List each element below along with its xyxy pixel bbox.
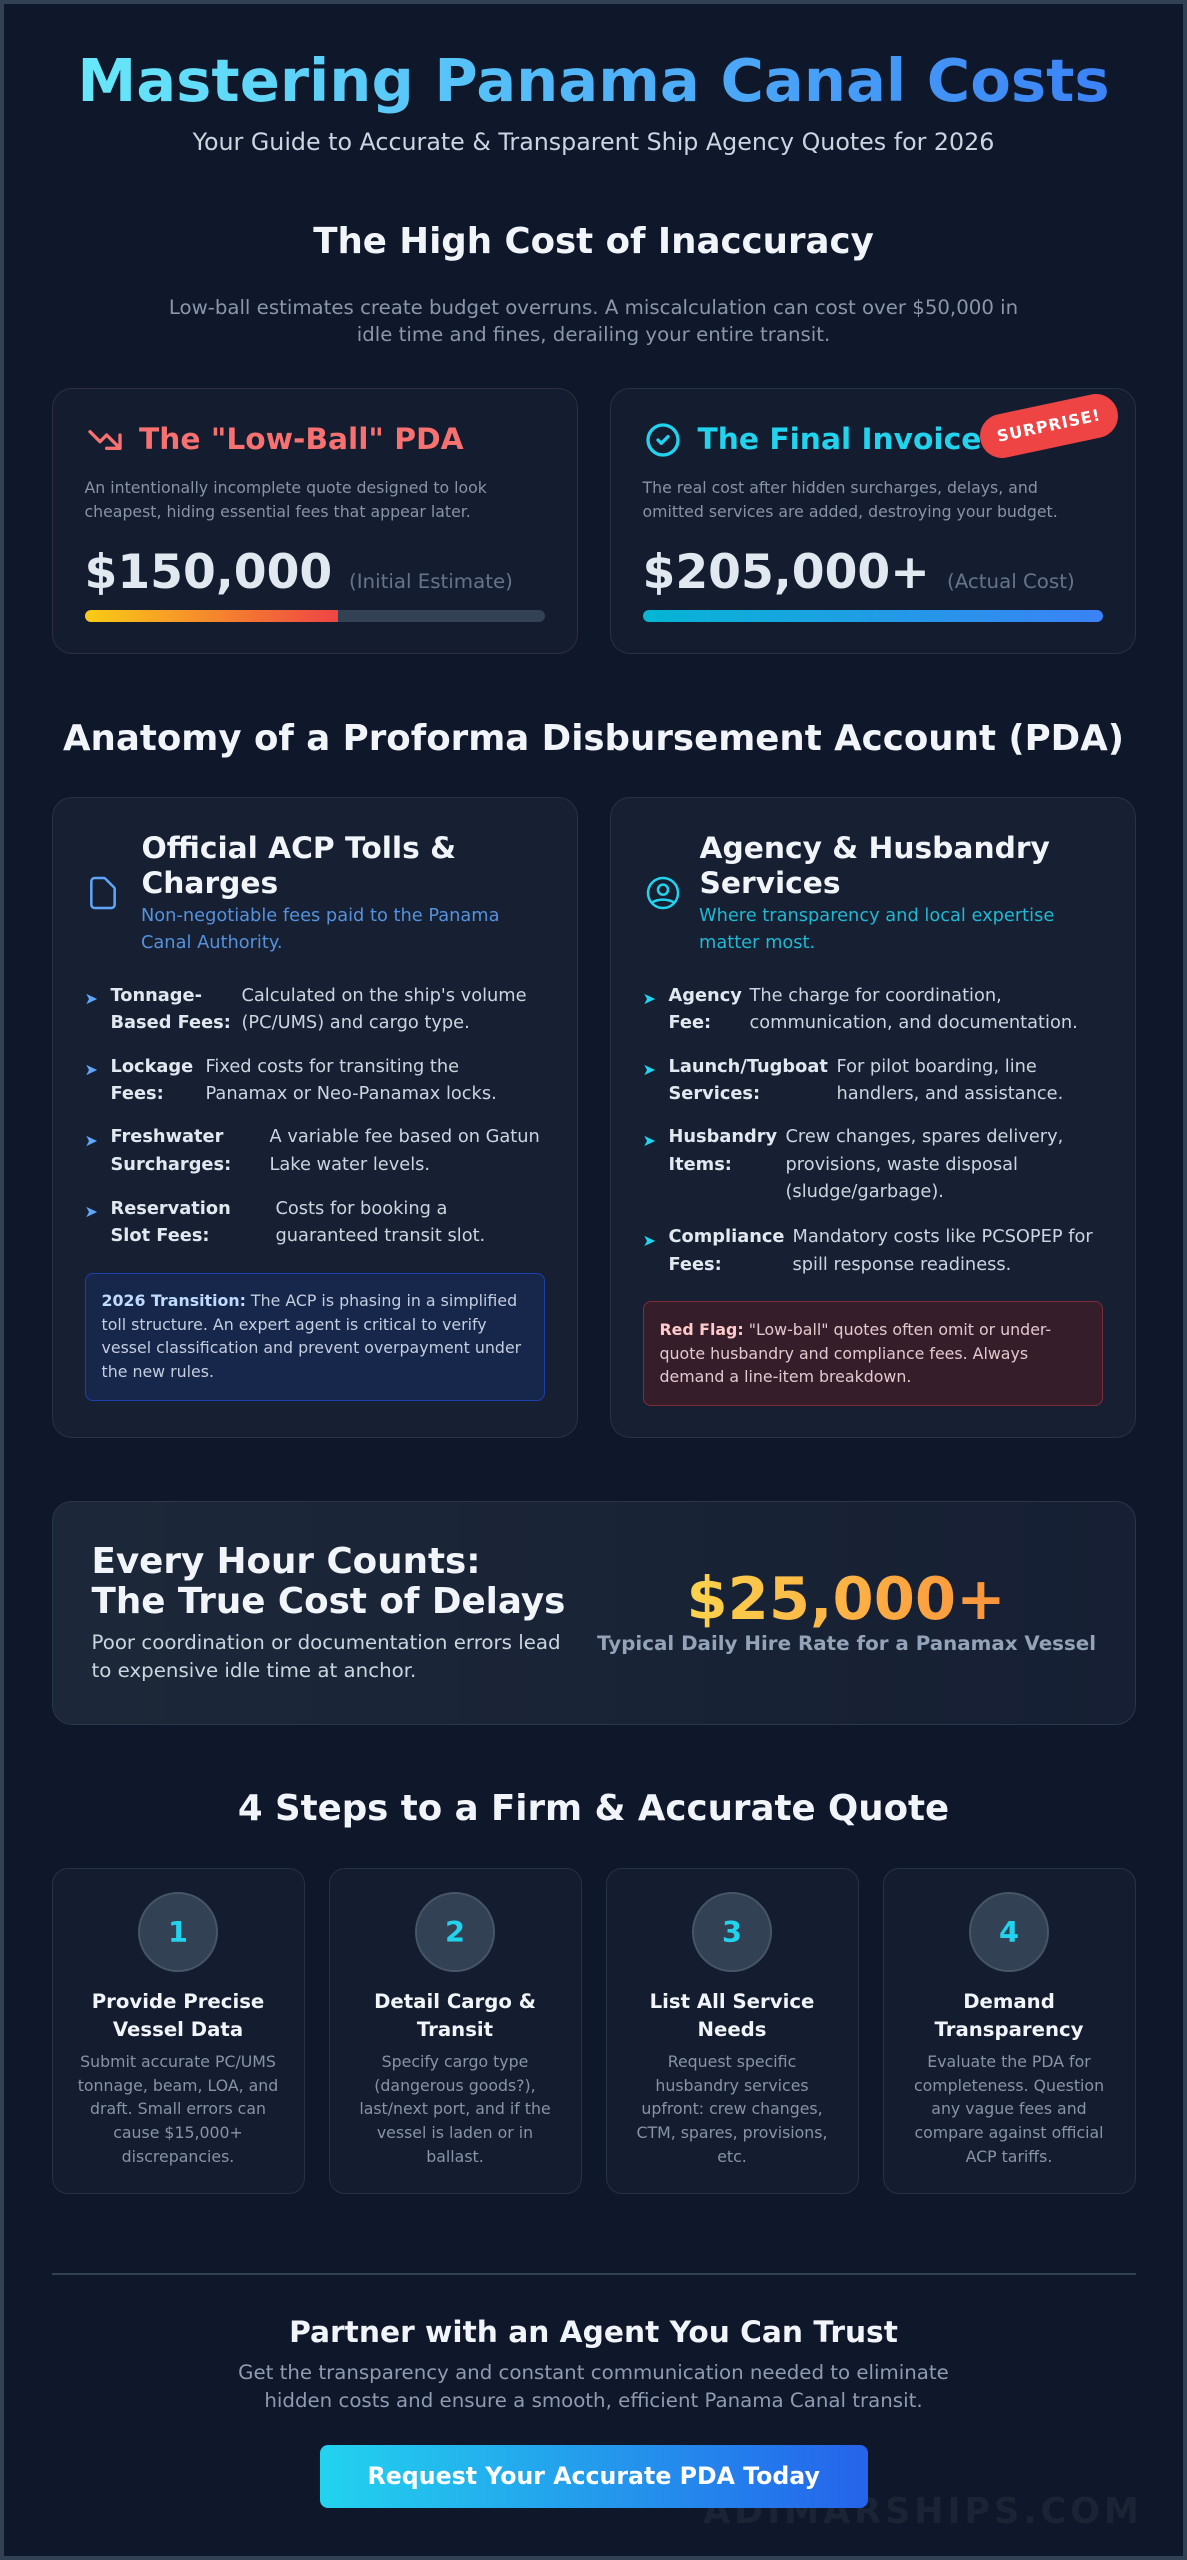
step number: [692, 1892, 772, 1972]
step title: [92, 1990, 264, 2041]
closing paragraph: Get the transparency and constant communication needed to eliminate: [238, 2360, 949, 2384]
callout: 2026 transition: vessel classification and prevent overpayment under: [102, 1338, 521, 1357]
heading: anatomy: Anatomy of a Proforma Disbursement Account (PDA): [63, 718, 1124, 759]
step card 4: [882, 1868, 1136, 2194]
panel subtitle: [141, 904, 500, 953]
list item: husbandry items: provisions, waste disposal: [786, 1154, 1018, 1174]
list item: launch tugboat: [642, 1056, 1063, 1104]
list item: compliance: spill response readiness.: [792, 1254, 1011, 1274]
icon: check circle: [646, 423, 680, 457]
step text: (dangerous goods?),: [374, 2076, 536, 2095]
list item: reservation: ➤: [84, 1202, 98, 1221]
list item: freshwater: Lake water levels.: [270, 1154, 430, 1174]
step title: Vessel Data: [113, 2018, 243, 2041]
step text: upfront: crew changes,: [641, 2099, 823, 2118]
panel heading: Agency & Husbandry: [700, 830, 1050, 866]
step text: Specify cargo type: [382, 2052, 528, 2071]
list item: lockage: Lockage: [110, 1056, 193, 1077]
card description: cheapest, hiding essential fees that appear later.: [84, 502, 471, 521]
panel: official ACP tolls: [52, 797, 578, 1438]
card description: [84, 478, 487, 521]
step text: completeness. Question: [914, 2076, 1104, 2095]
step text: any vague fees and: [931, 2099, 1087, 2118]
card description: [642, 478, 1058, 521]
step title: Detail Cargo &: [374, 1990, 536, 2013]
icon: trending down: [88, 430, 122, 450]
card description: omitted services are added, destroying your budget.: [642, 502, 1058, 521]
step text: CTM, spares, provisions,: [636, 2123, 827, 2142]
price: actual cost: $205,000+: [642, 545, 930, 600]
step number: 2: [445, 1915, 465, 1949]
list item: tonnage: (PC/UMS) and cargo type.: [242, 1012, 470, 1033]
list item: freshwater: Surcharges:: [110, 1154, 231, 1174]
list item: husbandry items: Items:: [668, 1154, 732, 1174]
list item: agency fee: ➤: [642, 989, 656, 1008]
panel: cost of delays: [52, 1501, 1136, 1724]
list item: agency fee: [642, 984, 1078, 1033]
delays paragraph: to expensive idle time at anchor.: [92, 1659, 416, 1682]
list item: compliance: Mandatory costs like PCSOPEP for: [792, 1226, 1093, 1247]
step text: ballast.: [426, 2147, 484, 2166]
list item: reservation: Slot Fees:: [110, 1225, 210, 1246]
price: initial estimate: [84, 545, 513, 600]
step text: [636, 2052, 827, 2166]
step title: Provide Precise: [92, 1990, 264, 2013]
heading: partner: Partner with an Agent You Can Trust: [289, 2314, 898, 2348]
step title: [374, 1990, 536, 2041]
subtitle: Your Guide to Accurate & Transparent Ship Agency Quotes for 2026: [193, 128, 994, 156]
list item: reservation: guaranteed transit slot.: [276, 1225, 485, 1246]
title: Mastering Panama Canal Costs: [77, 46, 1110, 115]
list item: tonnage: ➤: [84, 989, 98, 1008]
price: initial estimate: (Initial Estimate): [349, 570, 513, 593]
panel: low-ball PDA: [52, 388, 578, 654]
step text: compare against official: [914, 2123, 1104, 2142]
step text: etc.: [717, 2147, 747, 2166]
panel subtitle: Non-negotiable fees paid to the Panama: [141, 904, 500, 926]
step title: [934, 1990, 1084, 2041]
step number: [969, 1892, 1049, 1972]
list item: launch tugboat: ➤: [642, 1060, 656, 1079]
step number: [415, 1892, 495, 1972]
step number: 1: [168, 1915, 188, 1949]
step number: 3: [722, 1915, 742, 1949]
list item: tonnage: Based Fees:: [110, 1012, 231, 1033]
step title: Transit: [417, 2018, 493, 2041]
list item: compliance: Compliance: [668, 1226, 784, 1247]
list item: husbandry items: Crew changes, spares delivery,: [786, 1126, 1063, 1147]
panel subtitle: Canal Authority.: [141, 932, 282, 953]
delays heading: [92, 1540, 565, 1622]
list item: reservation: [84, 1198, 485, 1246]
big number: daily hire rate: $25,000+: [686, 1564, 1006, 1633]
heading: 4 steps: 4 Steps to a Firm & Accurate Quote: [238, 1788, 949, 1828]
closing paragraph: hidden costs and ensure a smooth, efficient Panama Canal transit.: [264, 2388, 923, 2412]
icon: document: [90, 876, 116, 910]
price: actual cost: (Actual Cost): [947, 570, 1075, 593]
price: initial estimate: $150,000: [84, 545, 332, 600]
list item: lockage: [84, 1056, 497, 1104]
step text: Submit accurate PC/UMS: [80, 2052, 276, 2071]
step text: tonnage, beam, LOA, and: [78, 2076, 278, 2095]
step number: 4: [999, 1915, 1019, 1949]
callout: 2026 transition: 2026 Transition: The ACP is phasing in a simplified: [102, 1291, 517, 1310]
step text: Request specific: [668, 2052, 796, 2071]
step text: last/next port, and if the: [359, 2099, 551, 2118]
step text: [359, 2052, 551, 2166]
list item: launch tugboat: Services:: [668, 1083, 760, 1104]
big number caption: Typical Daily Hire Rate for a Panamax Vessel: [597, 1632, 1096, 1655]
card description: The real cost after hidden surcharges, delays, and: [642, 478, 1038, 497]
list item: lockage: Fixed costs for transiting the: [206, 1056, 459, 1077]
panel subtitle: Where transparency and local expertise: [699, 904, 1054, 926]
list item: lockage: Fees:: [110, 1083, 164, 1104]
intro paragraph: [169, 296, 1018, 346]
step text: husbandry services: [655, 2076, 809, 2095]
step text: Evaluate the PDA for: [927, 2052, 1091, 2071]
list item: agency fee: Agency: [668, 984, 742, 1006]
delays paragraph: [92, 1631, 561, 1682]
call to action button: [320, 2445, 868, 2508]
progress bar: low-ball: [84, 610, 544, 622]
heading: the high cost of inaccuracy: The High Cost of Inaccuracy: [313, 220, 874, 262]
list item: lockage: Panamax or Neo-Panamax locks.: [206, 1083, 497, 1104]
panel subtitle: matter most.: [699, 932, 815, 953]
step text: draft. Small errors can: [90, 2099, 266, 2118]
panel heading: Services: [700, 866, 841, 901]
badge: surprise: SURPRISE!: [995, 405, 1102, 446]
step title: Demand: [963, 1990, 1055, 2013]
watermark: ADIMARSHIPS.COM: [703, 2491, 1143, 2532]
panel heading: [700, 830, 1050, 901]
list item: reservation: Costs for booking a: [276, 1198, 447, 1218]
step number: [138, 1892, 218, 1972]
list item: launch tugboat: Launch/Tugboat: [668, 1056, 828, 1077]
progress bar: final: [642, 610, 1102, 622]
callout: 2026 transition: the new rules.: [102, 1362, 214, 1381]
list item: tonnage: [84, 984, 527, 1033]
callout: red flag: Red Flag: "Low-ball" quotes often omit or under-: [660, 1320, 1051, 1339]
callout: red flag: demand a line-item breakdown.: [660, 1367, 911, 1386]
list item: tonnage: Tonnage-: [110, 984, 202, 1006]
step title: List All Service: [650, 1990, 814, 2013]
step title: Transparency: [935, 2018, 1083, 2041]
callout: red flag: quote husbandry and compliance fees. Always: [660, 1344, 1028, 1363]
list item: husbandry items: ➤: [642, 1130, 656, 1150]
list item: reservation: Reservation: [110, 1198, 231, 1218]
delays paragraph: Poor coordination or documentation errors lead: [92, 1631, 561, 1654]
card heading: The "Low-Ball" PDA: [139, 422, 464, 457]
list item: tonnage: Calculated on the ship's volume: [242, 984, 527, 1006]
intro paragraph: Low-ball estimates create budget overruns. A miscalculation can cost over $50,000 in: [169, 296, 1018, 318]
list item: freshwater: [84, 1126, 540, 1174]
list item: husbandry items: Husbandry: [668, 1126, 777, 1147]
closing paragraph: [238, 2360, 949, 2412]
badge: surprise: [975, 390, 1122, 462]
icon: user circle: [646, 876, 680, 910]
step text: discrepancies.: [122, 2147, 234, 2166]
panel heading: [142, 830, 456, 901]
list item: compliance: Fees:: [668, 1254, 722, 1274]
step text: [914, 2052, 1104, 2166]
step title: Needs: [698, 2018, 766, 2041]
step card 1: [52, 1868, 304, 2194]
list item: launch tugboat: For pilot boarding, line: [836, 1056, 1037, 1077]
list item: husbandry items: [642, 1126, 1063, 1202]
callout: 2026 transition: toll structure. An expert agent is critical to verify: [102, 1315, 487, 1334]
price: actual cost: [642, 545, 1075, 600]
step text: vessel is laden or in: [377, 2123, 533, 2142]
list item: agency fee: The charge for coordination,: [750, 984, 1002, 1006]
panel heading: Charges: [142, 866, 278, 901]
list item: freshwater: Freshwater: [110, 1126, 223, 1147]
delays heading: Every Hour Counts:: [92, 1540, 481, 1582]
step text: [78, 2052, 278, 2166]
list item: agency fee: Fee:: [668, 1012, 711, 1033]
list item: freshwater: ➤: [84, 1130, 98, 1150]
call to action button: Request Your Accurate PDA Today: [368, 2462, 820, 2490]
callout: red flag: [642, 1301, 1102, 1406]
list item: compliance: [642, 1226, 1093, 1274]
step text: ACP tariffs.: [966, 2147, 1052, 2166]
step card 3: [606, 1868, 858, 2194]
card description: An intentionally incomplete quote designed to look: [84, 478, 487, 497]
panel: final invoice: [610, 388, 1136, 654]
callout: 2026 transition: [84, 1273, 544, 1401]
panel subtitle: [699, 904, 1054, 953]
list item: freshwater: A variable fee based on Gatun: [270, 1126, 540, 1147]
list item: lockage: ➤: [84, 1060, 98, 1079]
panel: agency and husbandry: [610, 797, 1136, 1438]
step text: cause $15,000+: [113, 2123, 243, 2142]
list item: launch tugboat: handlers, and assistance.: [836, 1083, 1063, 1104]
panel heading: Official ACP Tolls &: [142, 830, 456, 866]
step title: [650, 1990, 814, 2041]
delays heading: The True Cost of Delays: [92, 1580, 565, 1622]
card heading: The Final Invoice: [698, 422, 981, 457]
list item: husbandry items: (sludge/garbage).: [786, 1181, 944, 1202]
intro paragraph: idle time and fines, derailing your entire transit.: [357, 323, 830, 346]
step card 2: [328, 1868, 582, 2194]
list item: compliance: ➤: [642, 1230, 656, 1250]
list item: agency fee: communication, and documentation.: [750, 1012, 1078, 1033]
